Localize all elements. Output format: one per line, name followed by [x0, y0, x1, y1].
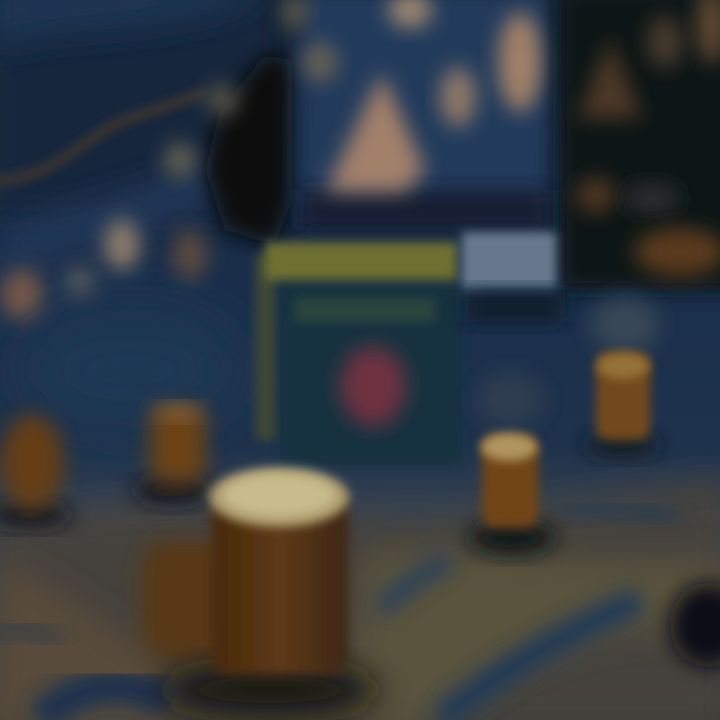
central box: [255, 242, 462, 465]
box face: [280, 280, 462, 465]
candle: centre right: [468, 372, 556, 554]
dark object bottom right: [670, 583, 720, 667]
large cylinder: [160, 467, 380, 714]
panel: left mid blue wall: [20, 310, 240, 430]
panel: top right dark shelf: [560, 0, 720, 290]
table surface: [0, 480, 720, 720]
dark vertical figure: [205, 55, 292, 245]
yellow band: [265, 242, 457, 280]
candle: left: [134, 405, 210, 504]
dark block below light box: [465, 292, 565, 322]
red emblem: [340, 346, 406, 426]
candle: far left: [0, 414, 72, 527]
light blue box: [462, 232, 556, 290]
green text strip: [295, 298, 435, 322]
box side: [255, 255, 277, 440]
small cylinder beside large one: [142, 540, 232, 660]
bunting lights on the left: [0, 84, 238, 321]
panel: centre poster with peach peaks: [281, 0, 550, 230]
candle: right: [584, 297, 660, 457]
panel: top left wave backdrop: [0, 0, 280, 255]
